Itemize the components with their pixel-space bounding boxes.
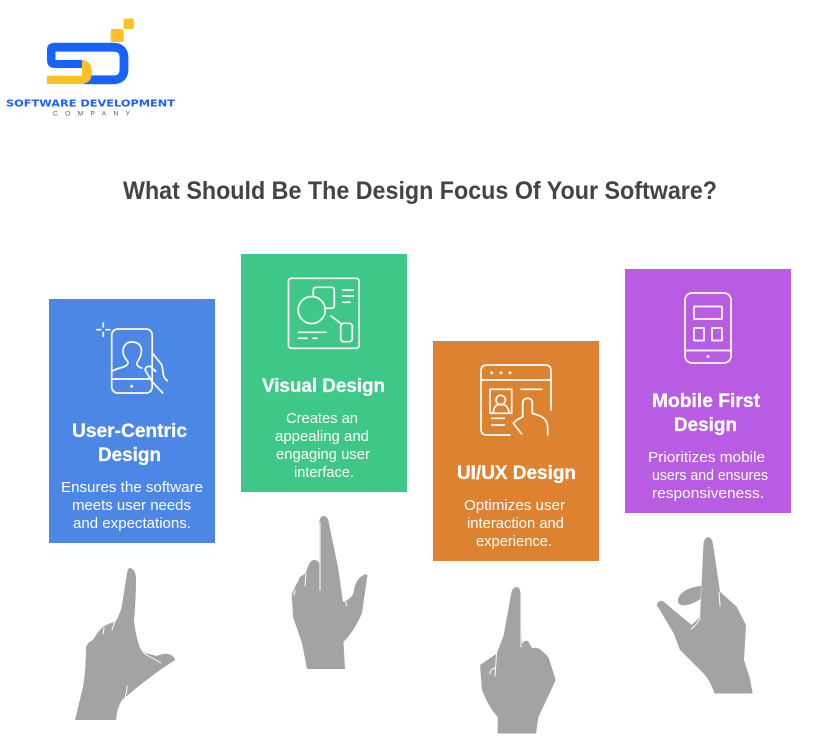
logo mark: SD monogram bbox=[47, 43, 124, 84]
description bbox=[61, 480, 203, 532]
icon: pointing hand 3 bbox=[480, 587, 556, 734]
description: Creates an bbox=[286, 411, 358, 427]
heading: User-Centric bbox=[72, 421, 187, 442]
description: and expectations. bbox=[73, 516, 191, 532]
description: Optimizes user bbox=[464, 498, 565, 514]
description: meets user needs bbox=[72, 498, 191, 514]
panel: UI/UX Design bbox=[433, 341, 599, 561]
description: Prioritizes mobile bbox=[648, 450, 765, 466]
panel: User-Centric Design: Design bbox=[98, 445, 161, 466]
heading: Mobile First bbox=[652, 391, 761, 412]
icon: pointing hand 4 bbox=[657, 537, 753, 694]
icon: browser window with touch bbox=[481, 365, 551, 435]
panel: Mobile First Design bbox=[625, 269, 791, 513]
icon: phone with user and hand bbox=[97, 323, 167, 393]
heading: UI/UX Design bbox=[457, 463, 576, 484]
heading: Visual Design bbox=[262, 376, 385, 397]
description: engaging user bbox=[276, 447, 370, 463]
panel: Visual Design bbox=[241, 254, 407, 492]
icon: design board bbox=[288, 278, 359, 348]
logo wordmark: SOFTWARE DEVELOPMENT bbox=[6, 98, 176, 109]
description bbox=[275, 411, 370, 481]
description: users and ensures bbox=[652, 468, 768, 484]
panel: User-Centric Design bbox=[49, 299, 215, 543]
description: Ensures the software bbox=[61, 480, 203, 496]
description: interaction and bbox=[467, 516, 564, 532]
title: What Should Be The Design Focus Of Your Software? bbox=[123, 177, 717, 205]
description bbox=[648, 450, 768, 502]
panel: Mobile First Design: Design bbox=[674, 415, 737, 436]
description bbox=[464, 498, 565, 550]
description: interface. bbox=[294, 465, 354, 481]
description: experience. bbox=[476, 534, 552, 550]
logo subtitle: COMPANY bbox=[53, 110, 131, 118]
icon: pointing hand 1 bbox=[75, 568, 175, 720]
icon: mobile layout bbox=[685, 293, 731, 363]
logo bbox=[6, 18, 176, 118]
description: appealing and bbox=[275, 429, 369, 445]
icon: pointing hand 2 bbox=[292, 516, 368, 669]
description: responsiveness. bbox=[652, 486, 764, 502]
